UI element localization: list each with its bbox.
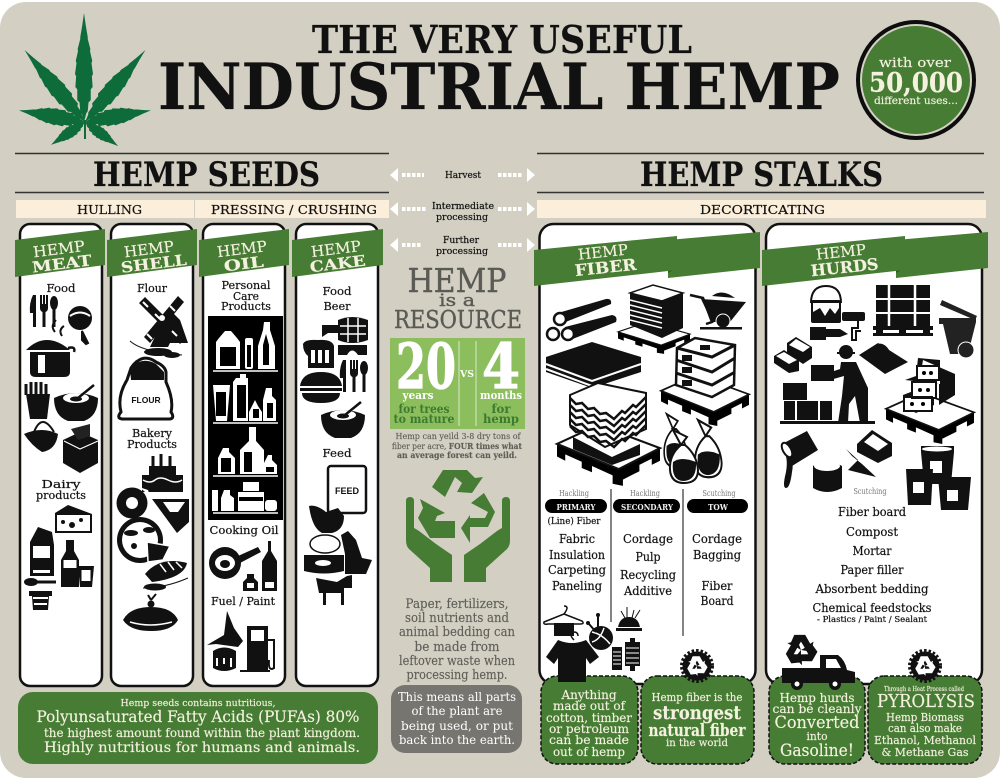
- callout: strongest natural fiber: Hemp fiber is the: [652, 690, 743, 704]
- callout: converted into gasoline: Converted: [774, 713, 860, 733]
- text: leftover waste: animal bedding can: [399, 625, 516, 640]
- callout: converted into gasoline: can be cleanly: [772, 702, 862, 716]
- shelf panel: personal care: [208, 316, 283, 520]
- label: dairy products: [36, 478, 86, 502]
- icon: worker and brick wall: [780, 345, 875, 424]
- process bar: decorticating: DECORTICATING: [700, 202, 825, 217]
- panel: hemp fiber: [534, 224, 760, 684]
- ribbon: hemp meat: HEMP: [32, 237, 86, 261]
- icons: food and beer: [300, 317, 368, 438]
- ribbon: hemp oil: OIL: [223, 253, 265, 275]
- icon: corrugated sheets on pallet: [557, 383, 660, 486]
- list: hurds uses: Chemical feedstocks: [812, 601, 932, 615]
- list: primary fiber uses: [548, 532, 606, 593]
- callout: strongest natural fiber: in the world: [666, 737, 728, 749]
- icon: panels on pallet: [618, 285, 690, 354]
- arrow row: intermediate processing: processing: [436, 213, 488, 223]
- arrow row: harvest: Harvest: [445, 171, 481, 181]
- arrow row: harvest: [390, 168, 535, 182]
- text: leftover waste: soil nutrients and: [405, 611, 509, 626]
- icon: bricks on pallet: [873, 284, 933, 336]
- callout: all parts used: back into the earth.: [399, 732, 515, 747]
- icon: sacks on pallet: [661, 338, 749, 426]
- arrow row: further processing: processing: [436, 247, 488, 257]
- process bar: hulling and pressing: HULLING: [77, 202, 142, 217]
- panel: hemp oil: [199, 224, 289, 686]
- icons: food: [24, 295, 98, 473]
- ribbon: hemp meat: MEAT: [31, 251, 94, 277]
- list: hurds uses: Compost: [846, 525, 898, 539]
- callout: all parts used: This means all parts: [398, 689, 516, 704]
- ribbon: hemp oil: HEMP: [216, 237, 268, 261]
- list: hurds uses: Absorbent bedding: [815, 582, 929, 596]
- label: personal care products: Care: [233, 290, 259, 303]
- ribbon: hemp hurds: [762, 232, 988, 286]
- callout: anything made out of hemp: can be made: [549, 732, 629, 747]
- label: dairy products: Dairy: [42, 478, 81, 491]
- fiber grades: hackling and scutching: TOW: [708, 502, 729, 512]
- icon: wheelbarrow: [690, 292, 746, 330]
- icons: buckets: [906, 446, 971, 510]
- ribbon: hemp cake: [292, 229, 383, 277]
- callout: anything made out of hemp: [541, 676, 638, 764]
- process bar: decorticating: [537, 200, 986, 218]
- label: bakery products: Products: [127, 438, 177, 451]
- callout: converted into gasoline: [769, 676, 865, 764]
- fiber grades: hackling and scutching: Scutching: [702, 489, 736, 498]
- fiber grades: hackling and scutching: SECONDARY: [621, 502, 673, 512]
- icon: paint can spill: [780, 431, 842, 492]
- callout: strongest natural fiber: [641, 676, 754, 764]
- icons: cooking oil: [209, 541, 277, 591]
- ribbon: hemp hurds: HEMP: [815, 241, 867, 264]
- ribbon: hemp fiber: FIBER: [574, 255, 638, 280]
- ribbon: hemp shell: HEMP: [123, 237, 175, 261]
- list: secondary fiber uses: Cordage: [623, 532, 673, 546]
- icon: pipes: [547, 299, 616, 340]
- list: hurds uses: [812, 505, 932, 624]
- text: leftover waste: leftover waste when: [399, 654, 516, 669]
- heading: hemp is a resource: RESOURCE: [394, 306, 522, 334]
- panel: 20 years vs 4 months: months: [480, 389, 522, 402]
- panel: 20 years vs 4 months: to mature: [394, 411, 455, 426]
- panel: 20 years vs 4 months: [390, 330, 525, 429]
- fiber grades: hackling and scutching: Hackling: [630, 489, 660, 498]
- text: leftover waste: be made from: [414, 640, 500, 655]
- callout: all parts used: [391, 685, 522, 753]
- panel: 20 years vs 4 months: 20: [396, 330, 456, 403]
- fiber grades: hackling and scutching: PRIMARY: [556, 502, 596, 512]
- callout: anything made out of hemp: cotton, timber: [546, 710, 632, 725]
- label: fuel and paint: Fuel / Paint: [211, 595, 276, 608]
- icons: bakery: [116, 454, 189, 631]
- list: hurds uses: Mortar: [852, 544, 892, 558]
- callout: converted into gasoline: into: [806, 730, 828, 743]
- callout: pyrolysis: Ethanol, Methanol: [874, 733, 976, 747]
- label: dairy products: products: [36, 489, 86, 502]
- list: secondary fiber uses: [620, 532, 676, 598]
- icon: flour bag: [119, 358, 173, 419]
- callout: anything made out of hemp: out of hemp: [553, 744, 625, 759]
- ribbon: hemp fiber: [534, 232, 760, 286]
- icon: hands holding recycling symbol: [406, 470, 510, 582]
- list: primary fiber uses: Insulation: [549, 548, 605, 562]
- icon: filled bags: [664, 414, 722, 483]
- ribbon: hemp cake: CAKE: [309, 252, 367, 276]
- title: INDUSTRIAL HEMP: [158, 50, 840, 125]
- icon: wheat: [130, 341, 182, 358]
- list: tow fiber uses: [692, 532, 742, 608]
- list: primary fiber uses: Paneling: [552, 579, 602, 593]
- ribbon: hemp shell: SHELL: [120, 251, 188, 277]
- panel: 20 years vs 4 months: for: [492, 401, 511, 416]
- callout: pyrolysis: Through a Heat Process called: [884, 686, 964, 693]
- callout: all parts used: being used, or put: [401, 718, 513, 733]
- icon: plastering trowel: [859, 343, 908, 374]
- panel: 20 years vs 4 months: hemp: [483, 411, 519, 426]
- icon: recycling truck: [782, 635, 855, 690]
- title: [158, 17, 840, 125]
- icon: bricks: [774, 337, 812, 373]
- fiber grades: hackling and scutching: Hackling: [559, 489, 589, 498]
- badge: with over 50,000 different uses: 50,000: [869, 68, 963, 99]
- list: hurds uses: - Plastics / Paint / Sealant: [817, 615, 928, 624]
- heading: hemp seeds: [15, 154, 389, 195]
- text: hemp yield: an average forest can yeild.: [397, 451, 517, 461]
- heading: hemp is a resource: HEMP: [408, 261, 506, 300]
- label: scutching: Scutching: [854, 487, 886, 496]
- fiber grades: hackling and scutching: [545, 489, 748, 636]
- icon: windmill: [139, 296, 188, 347]
- heading: hemp is a resource: [394, 261, 522, 334]
- callout: strongest natural fiber: strongest: [653, 702, 741, 724]
- list: primary fiber uses: Fabric: [559, 532, 595, 546]
- label: personal care products: Products: [221, 300, 271, 313]
- callout: anything made out of hemp: Anything: [561, 687, 616, 702]
- title: THE VERY USEFUL: [312, 17, 692, 62]
- panel: hemp cake: [292, 224, 383, 686]
- icons: animal feed: FEED: [335, 486, 359, 496]
- badge: with over 50,000 different uses: different uses...: [874, 96, 958, 107]
- callout: polyunsaturated fatty acids: Polyunsaturated Fatty Acids (PUFAs) 80%: [36, 708, 360, 726]
- icon: block pile on pallet: [886, 358, 974, 444]
- label: cooking oil: Cooking Oil: [210, 524, 279, 537]
- fiber grades: hackling and scutching: (Line) Fiber: [548, 516, 601, 527]
- process bar: hulling and pressing: [16, 200, 389, 218]
- ribbon: hemp oil: [199, 229, 289, 277]
- icon: waste bin: [939, 300, 977, 358]
- list: secondary fiber uses: Pulp: [636, 550, 661, 564]
- list: tow fiber uses: Cordage: [692, 532, 742, 546]
- icons: paint tools: [810, 286, 865, 340]
- callout: pyrolysis: [868, 676, 982, 764]
- callout: all parts used: of the plant are: [412, 703, 502, 718]
- ribbon: hemp cake: HEMP: [310, 237, 362, 261]
- icon: flour bag: FLOUR: [131, 395, 161, 405]
- label: food: Food: [46, 282, 76, 295]
- icon: brick and trowel: [846, 430, 892, 477]
- heading: hemp stalks: [537, 154, 984, 195]
- icons: textiles: [544, 606, 642, 682]
- panel: 20 years vs 4 months: 4: [482, 330, 520, 403]
- label: feed: Feed: [322, 447, 352, 460]
- list: hurds uses: Paper filler: [840, 563, 904, 577]
- list: tow fiber uses: Fiber: [702, 579, 733, 593]
- heading: hemp seeds: HEMP SEEDS: [93, 155, 320, 195]
- callout: polyunsaturated fatty acids: [18, 692, 378, 764]
- icon: recycling tyre fiber: [682, 650, 712, 682]
- callout: polyunsaturated fatty acids: the highest amount found within the plant kingdom.: [44, 725, 360, 740]
- text: hemp yield: [392, 432, 522, 461]
- badge: with over 50,000 different uses: with over: [879, 56, 952, 71]
- label: food and beer: [322, 285, 352, 313]
- list: primary fiber uses: Carpeting: [548, 563, 606, 577]
- list: hurds uses: Fiber board: [838, 505, 906, 519]
- label: bakery products: Bakery: [132, 427, 173, 440]
- callout: pyrolysis: can also make: [888, 721, 962, 735]
- text: leftover waste: Paper, fertilizers,: [406, 597, 508, 612]
- heading: hemp stalks: HEMP STALKS: [640, 155, 883, 195]
- panel: 20 years vs 4 months: for trees: [398, 401, 450, 416]
- icon: sheets stack: [546, 342, 641, 388]
- icons: dairy: [24, 505, 94, 610]
- callout: pyrolysis: PYROLYSIS: [877, 691, 975, 712]
- process bar: hulling and pressing: PRESSING / CRUSHING: [211, 202, 377, 217]
- badge: with over 50,000 different uses: [856, 20, 976, 140]
- text: hemp yield: Hemp can yeild 3-8 dry tons of: [396, 432, 521, 442]
- label: bakery products: [127, 427, 177, 451]
- panel: hemp meat: [15, 224, 105, 686]
- panel: hemp hurds: [762, 224, 988, 684]
- callout: polyunsaturated fatty acids: Hemp seeds contains nutritious,: [120, 698, 276, 709]
- list: secondary fiber uses: Additive: [623, 584, 672, 598]
- text: leftover waste: processing hemp.: [406, 668, 508, 683]
- list: secondary fiber uses: Recycling: [620, 568, 676, 582]
- arrow row: intermediate processing: Intermediate: [432, 202, 494, 212]
- callout: anything made out of hemp: made out of: [553, 698, 626, 713]
- panel: 20 years vs 4 months: years: [402, 389, 434, 402]
- panel: hemp shell: [107, 224, 197, 686]
- ribbon: hemp fiber: HEMP: [577, 241, 629, 264]
- callout: pyrolysis: Hemp Biomass: [886, 710, 964, 724]
- text: leftover waste: [399, 597, 516, 683]
- label: personal care products: [221, 279, 271, 313]
- icon: recycling tyre hurds: [910, 650, 940, 682]
- ribbon: hemp shell: [107, 229, 197, 277]
- text: hemp yield: fiber per acre, FOUR times what: [392, 442, 522, 452]
- icons: fuel and paint: [207, 611, 274, 672]
- ribbon: hemp hurds: HURDS: [810, 254, 879, 280]
- list: tow fiber uses: Bagging: [693, 548, 741, 562]
- heading: hemp is a resource: is a: [439, 291, 475, 311]
- panel: 20 years vs 4 months: VS: [459, 370, 474, 380]
- arrow row: further processing: [390, 236, 535, 257]
- callout: anything made out of hemp: or petroleum: [549, 721, 629, 736]
- label: personal care products: Personal: [222, 279, 271, 292]
- callout: converted into gasoline: Gasoline!: [780, 741, 854, 761]
- callout: converted into gasoline: Hemp hurds: [780, 691, 854, 705]
- arrow row: intermediate processing: [390, 202, 535, 223]
- arrow row: further processing: Further: [443, 236, 480, 246]
- icon: hemp leaf: [18, 13, 152, 151]
- callout: pyrolysis: & Methane Gas: [882, 745, 969, 759]
- ribbon: hemp meat: [15, 229, 105, 277]
- label: flour: Flour: [137, 282, 168, 295]
- callout: polyunsaturated fatty acids: Highly nutritious for humans and animals.: [44, 740, 360, 756]
- label: food and beer: Food: [322, 285, 352, 298]
- list: tow fiber uses: Board: [700, 594, 734, 608]
- label: food and beer: Beer: [324, 300, 351, 313]
- icons: animal feed: [304, 466, 372, 605]
- callout: strongest natural fiber: natural fiber: [648, 721, 746, 741]
